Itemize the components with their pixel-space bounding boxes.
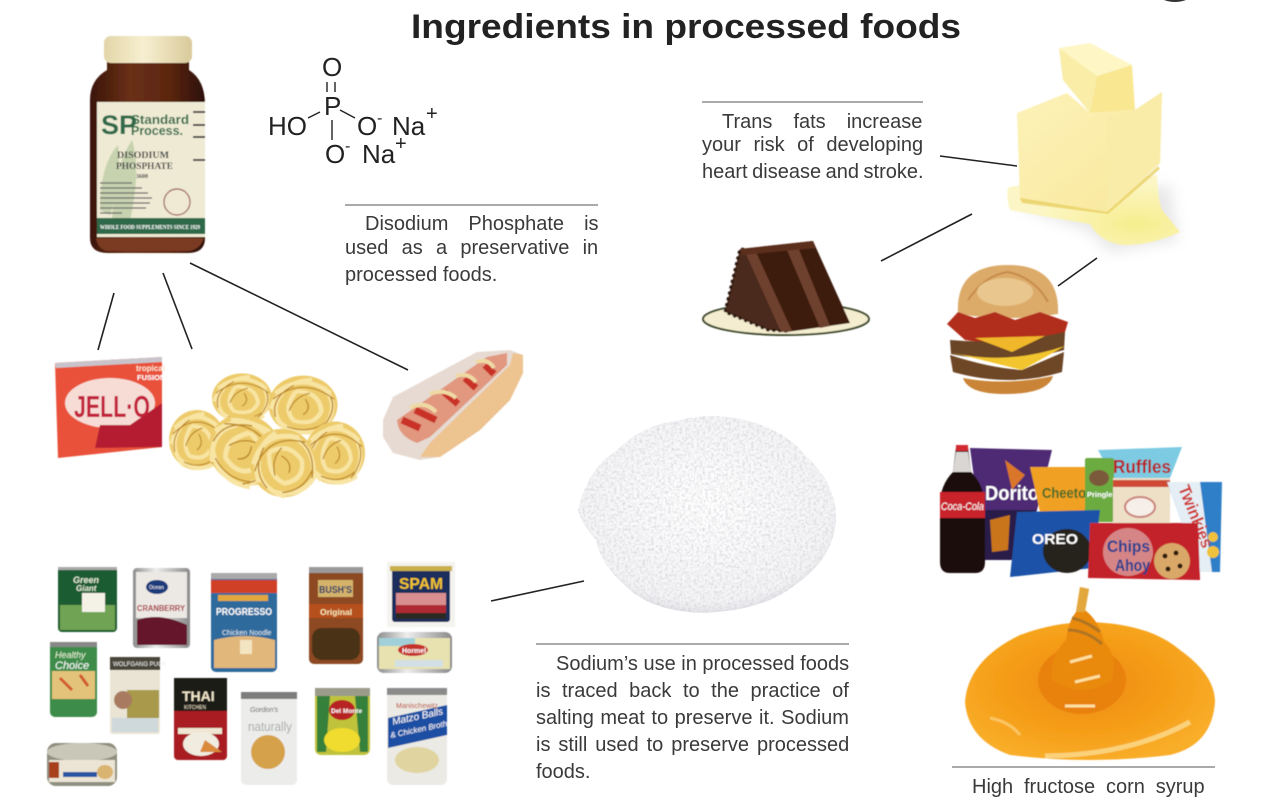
text block: disodium phosphate: Disodium Phosphate is [365, 213, 599, 235]
snack: twinkies box [1167, 482, 1222, 572]
can: green giant [58, 567, 117, 632]
can: progresso: Chicken Noodle [222, 630, 272, 637]
chemical formula: disodium phosphate: Na [362, 139, 396, 169]
caption: high fructose corn syrup: High fructose corn syrup [972, 776, 1205, 798]
can: gordon naturally [241, 692, 297, 785]
text block: trans fats [702, 102, 924, 183]
can: ocean spray: CRANBERRY [137, 604, 186, 613]
can: manischewitz: Manischewitz [396, 703, 439, 710]
text block: sodium: Sodium’s use in processed foods [556, 653, 849, 675]
text block: sodium: salting meat to preserve it. Sodium [536, 707, 849, 729]
can: thai kitchen: KITCHEN [184, 705, 206, 711]
icon: supplement bottle: SP [101, 110, 137, 140]
chemical formula: disodium phosphate: O [322, 52, 342, 82]
snack: doritos bag [970, 448, 1052, 560]
can: thai kitchen [174, 678, 227, 760]
can: hormel tuna [377, 632, 452, 673]
can: small tuna [47, 743, 117, 786]
icon: honey corn syrup [965, 587, 1215, 760]
can: healthy choice: Healthy [55, 650, 86, 660]
snack: cheetos [1030, 467, 1087, 512]
chemical formula: disodium phosphate: O [357, 111, 377, 141]
snack: chips ahoy: Chips [1107, 537, 1150, 556]
can: bush's beans: Original [320, 607, 352, 617]
can: gordon naturally: Gordon's [250, 707, 279, 714]
icon: jell-o box [55, 357, 165, 458]
chemical formula: disodium phosphate: HO [268, 111, 307, 141]
can: hormel tuna: Hormel [402, 648, 426, 655]
icon: tagliatelle nests [169, 373, 365, 509]
text block: disodium phosphate [345, 205, 599, 286]
can: manischewitz: & Chicken Broth [390, 719, 448, 740]
snack: chips ahoy: Ahoy [1115, 556, 1150, 575]
icon: supplement bottle [90, 36, 205, 253]
chemical formula: disodium phosphate: O [325, 139, 345, 169]
can: progresso: PROGRESSO [216, 606, 272, 618]
text block: sodium: foods. [536, 761, 590, 783]
snack: oreo [1010, 510, 1100, 577]
icon: corner mark [1164, 0, 1186, 2]
can: ocean spray: Ocean [149, 585, 164, 591]
chemical formula: disodium phosphate: + [426, 103, 438, 125]
can: gordon naturally: naturally [248, 719, 292, 734]
icon: supplement bottle: DISODIUM [117, 151, 169, 161]
can: ocean spray [133, 568, 190, 648]
icon: supplement bottle: Process. [131, 124, 183, 138]
chemical formula: disodium phosphate: P [324, 91, 341, 121]
can: del monte: Del Monte [331, 708, 362, 715]
can: healthy choice [50, 642, 97, 717]
snack: cola bottle [940, 445, 985, 573]
text block: disodium phosphate: used as a preservative in [345, 237, 598, 259]
can: spam: SPAM [399, 576, 443, 593]
text block: trans fats: your risk of developing [702, 134, 923, 156]
chemical formula: disodium phosphate [268, 52, 438, 169]
title: Ingredients in processed foods [411, 8, 961, 46]
icon: jell-o box: FUSION [137, 373, 165, 382]
text block: sodium: is traced back to the practice of [536, 680, 849, 702]
can: green giant: Green [73, 575, 100, 585]
icon: bacon cheeseburger [947, 265, 1068, 394]
icon: jell-o box: tropical [136, 364, 165, 373]
icon: hot dog [383, 350, 523, 460]
chemical formula: disodium phosphate: - [345, 138, 350, 155]
text block: sodium [536, 644, 849, 783]
snack: oreo: OREO [1032, 531, 1078, 548]
snack: cola bottle: Coca-Cola [941, 501, 984, 513]
snack: white box [1113, 478, 1170, 524]
text block: trans fats: heart disease and stroke. [702, 161, 924, 183]
can: healthy choice: Choice [55, 660, 89, 672]
can: wolfgang puck [110, 657, 166, 734]
snack: chips ahoy [1088, 523, 1200, 580]
can: manischewitz: Matzo Balls [391, 706, 444, 728]
can: del monte [315, 688, 370, 755]
icon: supplement bottle: Standard [131, 113, 189, 127]
icon: salt pile [578, 416, 836, 613]
icon: supplement bottle: PHOSPHATE [116, 162, 173, 172]
icon: snack foods group [940, 445, 1222, 580]
can: spam [387, 562, 455, 627]
icon: supplement bottle: WHOLE FOOD SUPPLEMENTS SINCE 1929 [100, 224, 201, 231]
can: wolfgang puck: WOLFGANG PUCK [113, 662, 166, 668]
snack: ruffles: Ruffles [1113, 457, 1171, 477]
icon: chocolate cake slice [703, 241, 869, 335]
chemical formula: disodium phosphate: - [377, 110, 382, 127]
text block: trans fats: Trans fats increase [722, 111, 922, 133]
icon: supplement bottle: 3608 [136, 174, 148, 180]
can: bush's beans [309, 567, 363, 664]
icon: jell-o box: JELL·O [74, 389, 150, 424]
connector lines [98, 156, 1097, 601]
text block: sodium: is still used to preserve processed [536, 734, 849, 756]
snack: pringles [1085, 458, 1117, 522]
can: thai kitchen: THAI [182, 688, 215, 704]
snack: pringles: Pringles [1087, 490, 1117, 499]
snack: twinkies box: Twinkies [1174, 482, 1217, 551]
snack: cheetos: Cheeto [1042, 485, 1086, 502]
can: manischewitz [387, 688, 448, 785]
chemical formula: disodium phosphate: Na [392, 111, 426, 141]
can: progresso [211, 573, 277, 672]
text block: disodium phosphate: processed foods. [345, 264, 497, 286]
snack: ruffles [1098, 447, 1182, 478]
can: bush's beans: BUSH'S [319, 584, 352, 596]
chemical formula: disodium phosphate: + [395, 133, 407, 155]
can: green giant: Giant [76, 584, 97, 593]
icon: canned foods group [47, 562, 455, 786]
snack: doritos bag: Dorito [985, 483, 1039, 505]
icon: butter [1007, 43, 1180, 252]
